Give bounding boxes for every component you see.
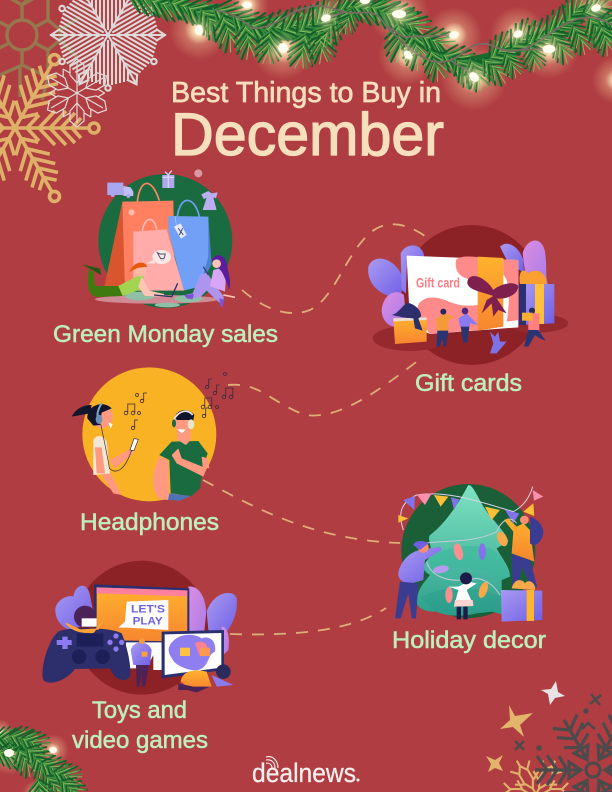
garland: bottom left xyxy=(0,719,92,792)
bunting xyxy=(401,487,533,530)
star: large gold xyxy=(500,705,533,737)
panel: Holiday decor xyxy=(392,484,546,654)
icons: truck gift dress xyxy=(107,183,133,198)
light string and bulbs xyxy=(423,519,517,595)
star: white xyxy=(541,681,565,705)
gift box left xyxy=(393,317,427,344)
label: Gift cards xyxy=(415,370,522,397)
person behind controller xyxy=(74,606,96,628)
screen text xyxy=(131,603,165,627)
person left xyxy=(398,547,442,583)
music notes xyxy=(124,372,233,430)
bottom left needles xyxy=(0,723,92,792)
wifi arcs xyxy=(266,757,278,768)
wire and needles xyxy=(126,0,612,94)
man xyxy=(153,457,169,500)
child xyxy=(448,582,477,607)
person crouching xyxy=(181,670,212,688)
woman sitting xyxy=(186,273,224,303)
illustration: shopping bags xyxy=(82,169,235,308)
illustration: decorating tree xyxy=(395,484,543,622)
bottom left bulbs xyxy=(4,747,57,757)
bottom left glows xyxy=(0,719,69,792)
leaves xyxy=(55,586,95,630)
bulb glow xyxy=(184,0,609,93)
panel: Gift cards xyxy=(368,225,568,397)
screen text: LET'S xyxy=(131,603,165,615)
title xyxy=(171,77,444,168)
title line 2: December xyxy=(171,101,444,168)
label line 2: video games xyxy=(72,727,208,754)
panel: Green Monday sales xyxy=(53,169,278,348)
label line 1: Toys and xyxy=(92,697,187,724)
illustration: headphones xyxy=(72,367,233,501)
snowflake: small white xyxy=(41,59,113,127)
logo: dealnews xyxy=(252,757,360,788)
panel: Toys and video games xyxy=(42,561,237,754)
monitor xyxy=(94,584,189,645)
girl xyxy=(102,472,122,495)
people xyxy=(436,313,455,332)
label: Holiday decor xyxy=(392,627,546,654)
woman lying down xyxy=(88,270,123,297)
leaves xyxy=(368,259,403,298)
tree xyxy=(417,485,512,617)
snowflake: brown xyxy=(0,0,80,100)
panel: Headphones xyxy=(72,367,233,536)
controller xyxy=(42,628,130,683)
gift box xyxy=(512,580,535,590)
wordmark: dealnews xyxy=(252,758,356,788)
label: Green Monday sales xyxy=(53,321,278,348)
label: Headphones xyxy=(80,509,219,536)
plant xyxy=(490,332,507,353)
glow halos xyxy=(169,0,612,111)
snowflake: gold xyxy=(0,47,99,209)
title line 1: Best Things to Buy in xyxy=(171,77,441,109)
person right xyxy=(504,518,534,562)
dashed connectors xyxy=(203,224,425,634)
snowflake: white striped xyxy=(50,0,166,91)
person standing xyxy=(131,642,152,665)
illustration: video games xyxy=(42,561,237,695)
snowflake: dark grey bottom right xyxy=(535,712,612,792)
stars and dots bottom right xyxy=(486,681,601,772)
screen text: PLAY xyxy=(133,615,163,627)
card xyxy=(407,256,518,334)
garland: top string of lights xyxy=(126,0,612,111)
gift box right xyxy=(519,284,554,325)
bulbs xyxy=(195,0,602,84)
snowflake: gold bottom xyxy=(498,754,574,792)
label xyxy=(72,697,208,754)
star: small gold xyxy=(486,755,503,772)
tablet xyxy=(162,630,224,678)
card text: Gift card xyxy=(416,275,460,291)
marks: dark xyxy=(515,694,601,750)
illustration: gift card xyxy=(368,225,568,365)
ribbon bow xyxy=(467,276,518,317)
